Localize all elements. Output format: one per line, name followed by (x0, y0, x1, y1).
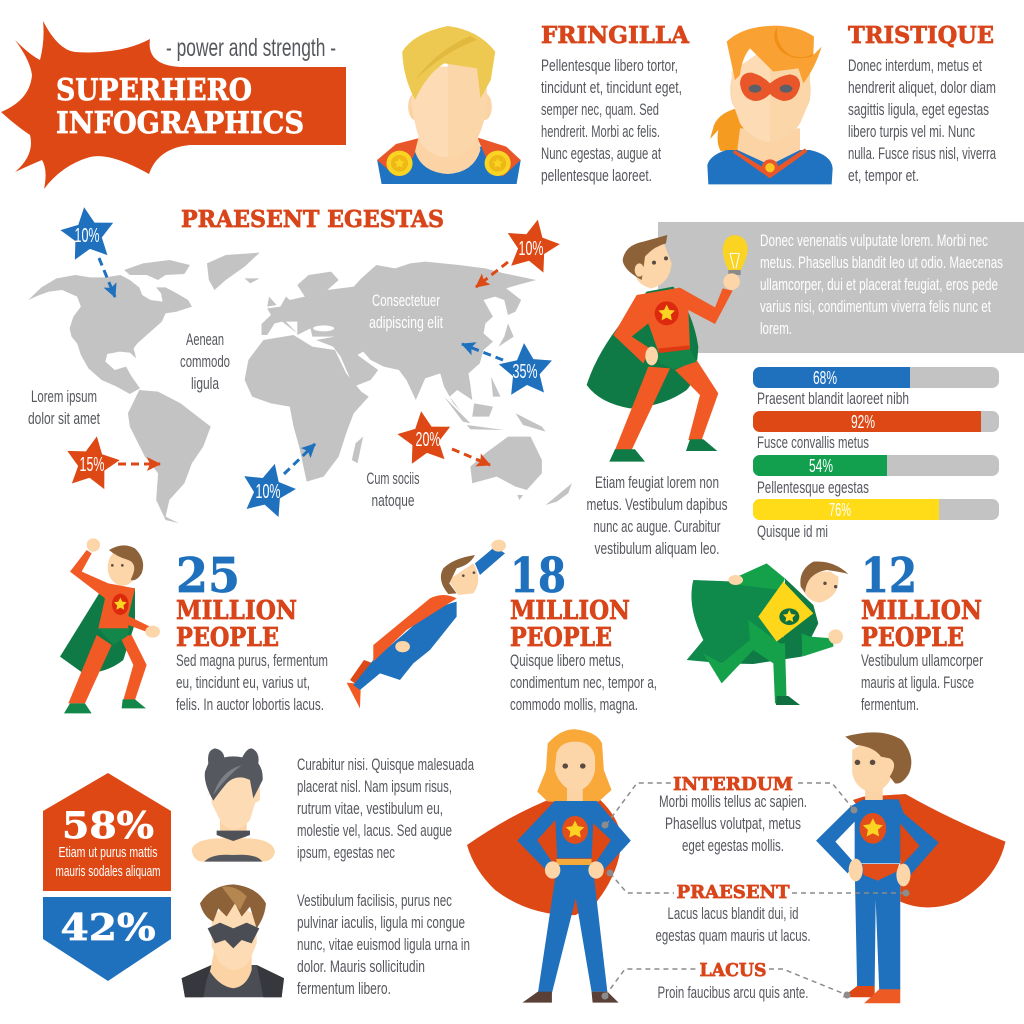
map label: consectetuer: Consectetuer (372, 292, 440, 310)
hero caption: nunc ac augue. Curabitur (594, 518, 721, 536)
title banner: INFOGRAPHICS (56, 106, 304, 141)
stat: 12 million (861, 548, 983, 714)
marker: north america 10%: 10% (74, 225, 100, 247)
stat: 12 million: MILLION (861, 596, 982, 626)
text: cat woman: Curabitur nisi. Quisque malesuada (297, 756, 475, 774)
marker: asia 35% (462, 341, 554, 395)
hero caption: Etiam feugiat lorem non (595, 474, 719, 492)
hero caption (586, 474, 728, 558)
text: masked man: pulvinar iaculis, ligula mi congue (297, 914, 465, 932)
heading: tristique: TRISTIQUE (848, 22, 994, 49)
map label: aenean: Aenean (186, 331, 224, 349)
panel text (760, 232, 1003, 338)
stat: 25 million: MILLION (176, 596, 297, 626)
marker: south america 15%: 15% (80, 454, 105, 476)
avatar: masked man (182, 884, 284, 997)
map label: aenean (180, 331, 230, 393)
text: tristique (848, 57, 997, 185)
callout: interdum: Morbi mollis tellus ac sapien. (659, 793, 807, 811)
hexagon: 42% (43, 897, 171, 981)
text: masked man (297, 892, 470, 998)
callout: lacus: Proin faucibus arcu quis ante. (658, 984, 808, 1002)
marker: australia 20% (395, 408, 490, 465)
bar: 68% (753, 367, 999, 408)
callout: lacus (658, 960, 808, 1002)
stat: 25 million: Sed magna purus, fermentum (176, 652, 328, 670)
marker: africa 10%: 10% (256, 481, 281, 503)
map label: cum sociis: Cum sociis (366, 470, 420, 488)
world map (28, 253, 572, 523)
bar: 68%: Praesent blandit laoreet nibh (757, 390, 909, 408)
male hero (816, 732, 1005, 1003)
text: fringilla: Pellentesque libero tortor, (541, 57, 678, 75)
bar: 76%: Quisque id mi (757, 523, 828, 541)
text: fringilla: semper nec, quam. Sed (541, 101, 659, 119)
callout: interdum: eget egestas mollis. (682, 837, 784, 855)
map label: aenean: ligula (191, 375, 220, 393)
stat: 25 million: PEOPLE (176, 623, 279, 653)
callout: praesent: Lacus lacus blandit dui, id (668, 905, 798, 923)
marker: australia 20%: 20% (416, 429, 441, 451)
hero caption: metus. Vestibulum dapibus (586, 496, 728, 514)
stat: 12 million: 12 (861, 548, 917, 604)
bar: 68%: 68% (813, 368, 837, 388)
stat: 18 million: PEOPLE (510, 623, 612, 653)
stat: 18 million: Quisque libero metus, (510, 652, 624, 670)
map label: lorem (28, 388, 100, 428)
text: tristique: et, tempor et. (848, 167, 919, 185)
map label: cum sociis: natoque (372, 492, 414, 510)
map label: aenean: commodo (180, 353, 230, 371)
panel: grey info (658, 222, 1024, 353)
female hero (467, 729, 631, 1003)
hero caption: vestibulum aliquam leo. (594, 540, 720, 558)
title banner: SUPERHERO (56, 73, 252, 108)
text: tristique: libero turpis vel mi. Nunc (848, 123, 975, 141)
bar: 54%: 54% (809, 456, 833, 476)
title banner (1, 21, 346, 189)
text: masked man: fermentum libero. (297, 980, 391, 998)
stat: 18 million: MILLION (510, 596, 630, 626)
stat: 25 million: eu, tincidunt eu, varius ut, (176, 674, 310, 692)
stat: 18 million: 18 (510, 548, 566, 604)
hexagon: 58% (43, 773, 171, 891)
stat: 25 million: felis. In auctor lobortis lacus. (176, 696, 324, 714)
marker: russia 10% (476, 214, 564, 287)
avatar: blonde hero (377, 26, 521, 184)
heading: fringilla: FRINGILLA (541, 22, 690, 49)
stat: 18 million (510, 548, 657, 714)
bar: 92% (753, 411, 999, 452)
bar: 92%: Fusce convallis metus (757, 434, 869, 452)
text: cat woman (297, 756, 475, 862)
marker: south america 15% (62, 432, 160, 491)
callout: lacus: LACUS (700, 960, 766, 981)
subtitle: - power and strength - (166, 34, 336, 62)
map label: consectetuer: adipiscing elit (369, 314, 443, 332)
hero: flying (347, 540, 506, 708)
map label: cum sociis (366, 470, 420, 510)
hero: fist raised (60, 538, 160, 713)
text: fringilla: tincidunt et, tincidunt eget, (541, 79, 682, 97)
avatar: cat woman (192, 748, 275, 862)
text: cat woman: ipsum, egestas nec (297, 844, 395, 862)
text: masked man: Vestibulum facilisis, purus nec (297, 892, 452, 910)
stat: 25 million (176, 548, 328, 714)
callout: praesent: egestas quam mauris ut lacus. (656, 927, 810, 945)
text: fringilla: hendrerit. Morbi ac felis. (541, 123, 660, 141)
callout: interdum (659, 774, 807, 855)
marker: russia 10%: 10% (518, 238, 544, 260)
callout: interdum: INTERDUM (673, 774, 793, 795)
hexagon: 58%: Etiam ut purus mattis (58, 844, 158, 861)
text: cat woman: rutrum vitae, vestibulum eu, (297, 800, 443, 818)
bar: 76% (753, 499, 999, 541)
text: fringilla: Nunc egestas, augue at (541, 145, 661, 163)
callout: praesent: PRAESENT (676, 882, 790, 903)
hexagon: 58%: 58% (62, 805, 154, 847)
marker: asia 35%: 35% (512, 361, 538, 383)
callout: interdum: Phasellus volutpat, metus (665, 815, 801, 833)
bar: 76%: 76% (829, 500, 851, 520)
map label: lorem: dolor sit amet (28, 410, 100, 428)
text: fringilla (541, 57, 682, 185)
marker: north america 10% (58, 204, 118, 297)
text: masked man: dolor. Mauris sollicitudin (297, 958, 425, 976)
map label: consectetuer (369, 292, 443, 332)
callout: praesent (656, 882, 810, 945)
text: cat woman: molestie vel, lacus. Sed augue (297, 822, 452, 840)
hexagon: 42%: 42% (60, 907, 156, 949)
bar: 92%: 92% (851, 412, 875, 432)
stat: 12 million: mauris at ligula. Fusce (861, 674, 974, 692)
hero with light bulb (587, 235, 748, 462)
panel text: lorem. (760, 320, 792, 338)
text: cat woman: placerat nisl. Nam ipsum risus, (297, 778, 452, 796)
hero: running green (687, 561, 848, 705)
avatar: masked heroine (707, 26, 833, 184)
heading: praesent egestas: PRAESENT EGESTAS (181, 206, 444, 233)
bar: 54%: Pellentesque egestas (757, 479, 869, 497)
connector lines (602, 783, 910, 1000)
stat: 18 million: commodo mollis, magna. (510, 696, 638, 714)
marker: africa 10% (237, 444, 315, 519)
stat: 25 million: 25 (176, 548, 240, 604)
hexagon: 58%: mauris sodales aliquam (56, 863, 160, 880)
stat: 18 million: condimentum nec, tempor a, (510, 674, 657, 692)
stat: 12 million: PEOPLE (861, 623, 964, 653)
bar: 54% (753, 455, 999, 497)
text: masked man: nunc, vitae euismod ligula urna in (297, 936, 470, 954)
map label: lorem: Lorem ipsum (31, 388, 97, 406)
text: fringilla: pellentesque laoreet. (541, 167, 652, 185)
stat: 12 million: fermentum. (861, 696, 919, 714)
